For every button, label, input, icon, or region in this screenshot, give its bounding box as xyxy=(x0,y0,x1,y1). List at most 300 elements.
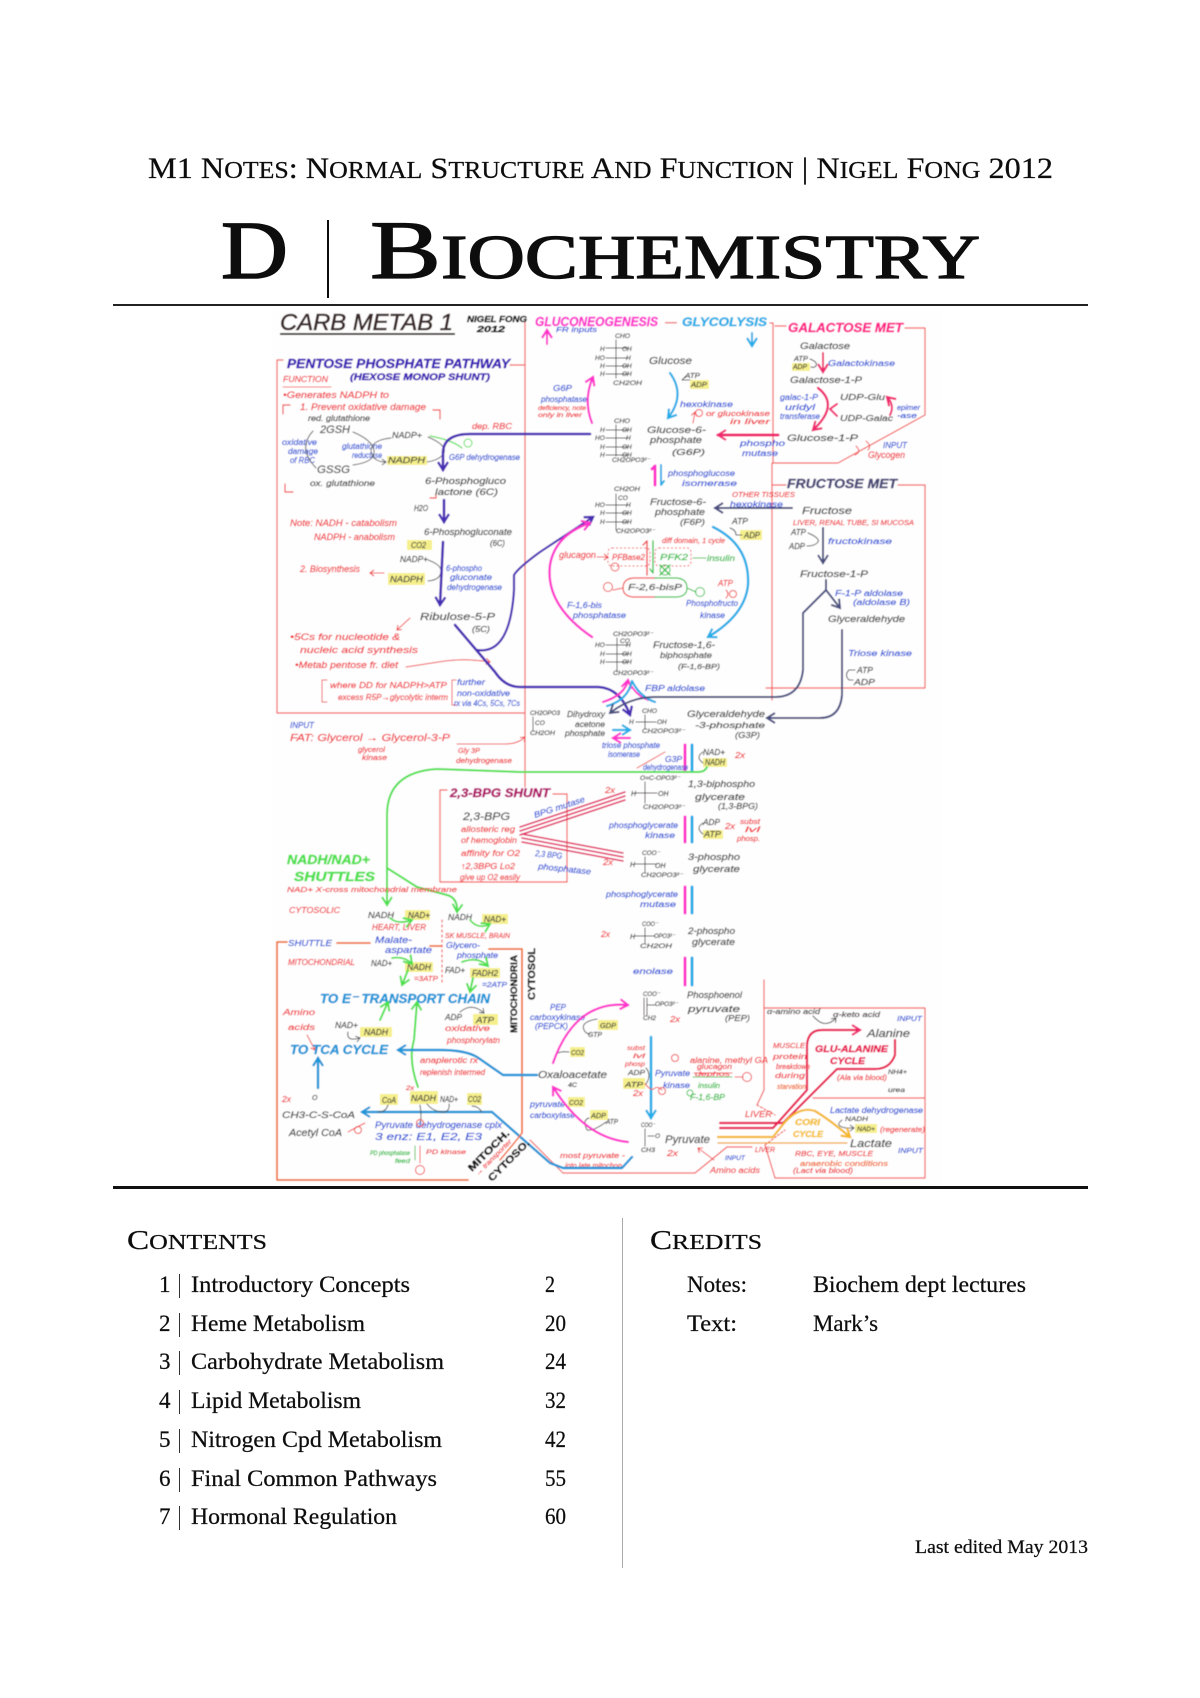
panel: PFK-2 regulation: PFBase2 xyxy=(612,552,645,562)
glucose-6-phosphate structure: H xyxy=(600,452,605,459)
panel frames: red and orange boundaries xyxy=(277,322,925,1180)
panel: gluconeogenesis bypass: dephos xyxy=(695,1072,730,1078)
diagram: carbohydrate metabolism map xyxy=(272,308,942,1185)
contents list: 20 xyxy=(545,1311,566,1336)
3-phosphoglycerate: H xyxy=(630,862,636,869)
title: carb metab: 2012 xyxy=(476,324,505,334)
panel: pentose phosphate pathway: (HEXOSE MONOP SHUNT) xyxy=(350,372,490,383)
panel: fructose 1,6-bisphosphate and aldolase: OH xyxy=(622,651,632,658)
panel: pentose phosphate pathway: 6-Phosphogluconate xyxy=(424,527,512,537)
panel: fructose 1,6-bisphosphate and aldolase: FBP aldolase xyxy=(645,683,705,693)
panel: 2,3-BPG shunt xyxy=(290,720,625,882)
panel: NADH/NAD+ shuttles: ADP xyxy=(444,1012,462,1022)
panel: pentose phosphate pathway: dehydrogenase xyxy=(447,582,502,592)
panel: glucose-alanine and Cori cycles: GLU-ALANINE xyxy=(815,1044,889,1055)
panel: lower glycolysis ladder: subst xyxy=(740,819,761,826)
panel: NADH/NAD+ shuttles: TO E⁻ TRANSPORT CHAIN xyxy=(320,992,491,1006)
3-phosphoglycerate: 3-phospho xyxy=(688,852,740,862)
panel: 2,3-BPG shunt: BPG mutase xyxy=(533,794,586,820)
panel: pentose phosphate pathway: excess R5P→glycolytic interm xyxy=(338,692,448,702)
panel: gluconeogenesis bypass: ATP xyxy=(624,1082,643,1089)
panel: fructose 1,6-bisphosphate and aldolase: CH2OPO3²⁻ xyxy=(613,631,654,638)
panel: NADH/NAD+ shuttles: NAD+ xyxy=(408,910,430,920)
panel: gluconeogenesis bypass: subst xyxy=(627,1045,646,1052)
panel: fructose metabolism: ATP xyxy=(856,665,873,675)
phosphoenolpyruvate: (PEP) xyxy=(725,1013,750,1023)
panel: galactose metabolism: phospho xyxy=(739,438,785,448)
panel: 2,3-BPG shunt: give up O2 easily xyxy=(460,872,521,882)
panel: fructose 1,6-bisphosphate and aldolase: H xyxy=(600,651,605,658)
contents list: 2 xyxy=(159,1311,170,1336)
panel: TCA entry: 3 enz: E1, E2, E3 xyxy=(375,1132,483,1143)
credits: Notes: xyxy=(687,1272,747,1298)
panel: fructose 1,6-bisphosphate and aldolase: CH2OPO3²⁻ xyxy=(613,670,654,677)
label: mitochondria and cytosol: CYTOSO. xyxy=(486,1138,532,1184)
panel: lower glycolysis ladder: triose phosphate xyxy=(602,740,660,750)
panel: PFK-2 regulation: Phosphofructo xyxy=(686,598,738,608)
triose structures xyxy=(530,708,765,740)
label: mitochondria and cytosol: MITOCH. xyxy=(466,1128,512,1174)
label: mitochondria and cytosol: CYTOSOL xyxy=(527,948,538,1000)
panel: lower glycolysis ladder: enolase xyxy=(633,966,673,976)
triose structures: Glyceraldehyde xyxy=(687,709,765,719)
panel: gluconeogenesis bypass: (PEPCK) xyxy=(535,1021,568,1031)
panel: galactose metabolism: -ase xyxy=(897,413,917,420)
panel: lower glycolysis ladder: 2x xyxy=(734,750,746,760)
panel: lower glycolysis ladder: ATP xyxy=(703,829,721,839)
panel: glucose-alanine and Cori cycles: urea xyxy=(888,1088,906,1094)
3-phosphoglycerate: CH2OPO3²⁻ xyxy=(641,872,684,879)
panel: pentose phosphate pathway: glutathione xyxy=(342,441,382,451)
panel: glucose-alanine and Cori cycles: starvation xyxy=(777,1082,806,1091)
diagram paper xyxy=(272,308,942,1185)
contents list: Nitrogen Cpd Metabolism xyxy=(191,1427,442,1453)
2-phosphoglycerate xyxy=(630,921,735,950)
panel: lower glycolysis ladder: phosphoglycerate xyxy=(605,889,678,899)
panel: galactose metabolism: transferase xyxy=(780,411,820,421)
panel: gluconeogenesis bypass: ADP xyxy=(590,1113,606,1120)
panel: NADH/NAD+ shuttles: =3ATP xyxy=(414,976,438,983)
contents list: 42 xyxy=(545,1427,566,1452)
panel: pentose phosphate pathway: NADPH - anabolism xyxy=(314,532,395,542)
1,3-BPG: 1,3-biphospho xyxy=(688,779,755,789)
panel: gluconeogenesis bypass: phosp xyxy=(624,1061,645,1068)
panel: 2,3-BPG shunt: dehydrogenase xyxy=(456,758,512,765)
panel: TCA entry: Acetyl CoA xyxy=(288,1128,342,1139)
panel: 2,3-BPG shunt: FAT: Glycerol → Glycerol-3-P xyxy=(290,733,450,744)
panel: glycolysis upper pathway: phosphatase xyxy=(540,394,587,404)
panel: pentose phosphate pathway: where DD for NADPH>ATP xyxy=(330,680,447,690)
title: carb metab: NIGEL FONG xyxy=(467,314,527,324)
3-phosphoglycerate: COO⁻ xyxy=(642,850,661,857)
panel: TCA entry: Pyruvate dehydrogenase cplx xyxy=(375,1120,503,1130)
3-phosphoglycerate: OH xyxy=(655,863,666,870)
panel: pentose phosphate pathway: 2GSH xyxy=(319,424,350,436)
2-phosphoglycerate: 2-phospho xyxy=(687,926,735,936)
panel: gluconeogenesis bypass: 4C xyxy=(568,1083,578,1089)
glucose-6-phosphate structure: CH2OPO3²⁻ xyxy=(612,457,651,464)
panel: fructose 1,6-bisphosphate and aldolase: HO xyxy=(595,642,605,649)
panel: glucose-alanine and Cori cycles: α-keto acid xyxy=(833,1012,882,1019)
panel: lower glycolysis ladder: ADP xyxy=(702,817,720,827)
panel: glycolysis upper pathway: Fructose-6- xyxy=(650,497,706,508)
panel: gluconeogenesis bypass: GTP xyxy=(588,1032,602,1039)
panel: pentose phosphate pathway: lactone (6C) xyxy=(435,487,498,497)
panel: pentose phosphate pathway: Ribulose-5-P xyxy=(420,612,495,623)
panel: pentose phosphate pathway: nucleic acid synthesis xyxy=(300,645,419,655)
heading: gluconeogenesis and glycolysis: GLUCONEOGENESIS xyxy=(535,314,658,329)
panel: lower glycolysis ladder xyxy=(600,740,761,1024)
panel: 2,3-BPG shunt: 2,3-BPG xyxy=(462,811,510,823)
panel: glycolysis upper pathway: phosphate xyxy=(649,435,702,445)
panel: 2,3-BPG shunt: 2,3 BPG xyxy=(534,848,563,861)
phosphoenolpyruvate: Phosphoenol xyxy=(687,990,743,1000)
panel: glucose-alanine and Cori cycles: NADH xyxy=(845,1116,868,1123)
1,3-BPG: OH xyxy=(658,791,669,798)
panel: PFK-2 regulation: PFK2 xyxy=(660,552,688,562)
panel: 2,3-BPG shunt: 2,3-BPG SHUNT xyxy=(449,786,552,800)
panel: galactose metabolism: Galactokinase xyxy=(828,358,895,368)
panel: glucose-alanine and Cori cycles: CORI xyxy=(795,1118,821,1127)
glucose-6-phosphate structure xyxy=(595,418,651,464)
phosphoenolpyruvate xyxy=(643,990,750,1024)
contents list: 3 xyxy=(159,1349,170,1374)
contents list: Carbohydrate Metabolism xyxy=(191,1349,444,1375)
panel: NADH/NAD+ shuttles: Malate- xyxy=(375,935,412,945)
glucose structure: OH xyxy=(622,371,632,378)
panel: pentose phosphate pathway: GSSG xyxy=(317,464,350,476)
panel: pentose phosphate pathway: 6-phospho xyxy=(446,563,482,573)
panel: gluconeogenesis bypass: kinase xyxy=(663,1080,690,1090)
glucose structure: H xyxy=(600,346,605,353)
panel: glycolysis upper pathway: ATP xyxy=(731,516,748,526)
panel: glycolysis upper pathway: (F6P) xyxy=(680,517,705,527)
credits heading: CREDITS xyxy=(650,1225,762,1255)
contents list: Heme Metabolism xyxy=(191,1311,365,1337)
panel: pentose phosphate pathway: PENTOSE PHOSPHATE PATHWAY xyxy=(287,356,511,371)
panel: glucose-alanine and Cori cycles: CYCLE xyxy=(793,1130,824,1139)
contents list: 5 xyxy=(159,1427,170,1452)
panel: pentose phosphate pathway: FUNCTION xyxy=(283,374,329,384)
fructose-6-phosphate structure: H xyxy=(600,519,605,526)
pyruvate: 2x xyxy=(666,1148,679,1158)
last edited note: Last edited May 2013 xyxy=(915,1537,1088,1558)
fructose-6-phosphate structure: OH xyxy=(622,510,632,517)
panel: pentose phosphate pathway: damage xyxy=(288,446,318,456)
panel: pentose phosphate pathway: Note: NADH - catabolism xyxy=(290,518,398,528)
panel: PFK-2 regulation: insulin xyxy=(707,553,735,563)
panel: NADH/NAD+ shuttles: MITOCHONDRIAL xyxy=(288,957,355,967)
panel: gluconeogenesis bypass: ATP xyxy=(605,1119,618,1126)
panel: fructose metabolism: fructokinase xyxy=(828,536,892,546)
triose structures: -3-phosphate xyxy=(695,720,765,730)
2-phosphoglycerate: CH2OH xyxy=(640,943,672,950)
panel: NADH/NAD+ shuttles: phosphate xyxy=(456,951,499,960)
panel: glucose-alanine and Cori cycles: α-amino acid xyxy=(767,1009,821,1016)
3-phosphoglycerate xyxy=(630,850,740,879)
fructose-6-phosphate structure: OH xyxy=(622,519,632,526)
fructose-6-phosphate structure: HO xyxy=(595,502,605,509)
panel: glucose-alanine and Cori cycles: during xyxy=(775,1071,806,1080)
panel: glycolysis upper pathway: ADP xyxy=(690,382,707,389)
panel: gluconeogenesis bypass: GDP xyxy=(600,1023,616,1030)
panel: glycolysis upper pathway: Glucose xyxy=(649,356,693,367)
panel: NADH/NAD+ shuttles: SK MUSCLE, BRAIN xyxy=(445,933,511,940)
pyruvate xyxy=(641,1122,710,1158)
pyruvate: COO⁻ xyxy=(641,1122,655,1129)
triose structures: CO xyxy=(535,720,545,727)
panel: glucose-alanine and Cori cycles: LIVER xyxy=(755,1147,775,1154)
panel: NADH/NAD+ shuttles: CYTOSOLIC xyxy=(289,905,341,915)
panel: gluconeogenesis bypass: Pyruvate xyxy=(655,1068,690,1078)
panel: fructose metabolism: Glyceraldehyde xyxy=(828,614,905,624)
panel: glycolysis upper pathway: isomerase xyxy=(682,478,737,488)
panel: TCA entry: 2x xyxy=(405,1086,415,1092)
panel: NADH/NAD+ shuttles: NADH/NAD+ xyxy=(287,852,370,867)
panel: NADH/NAD+ shuttles: NAD+ X-cross mitochondrial membrane xyxy=(287,885,457,894)
panel: galactose metabolism: GALACTOSE MET xyxy=(788,320,904,335)
2-phosphoglycerate: glycerate xyxy=(692,937,735,947)
panel: pentose phosphate pathway: rx via 4Cs, 5Cs, 7Cs xyxy=(454,698,521,708)
glucose structure: H xyxy=(626,355,631,362)
panel: glycolysis upper pathway xyxy=(538,327,795,540)
panel: glucose-alanine and Cori cycles: anaerobic conditions xyxy=(800,1159,888,1168)
panel: glucose-alanine and Cori cycles: INPUT xyxy=(898,1148,924,1155)
contents list: 24 xyxy=(545,1349,566,1374)
panel: fructose 1,6-bisphosphate and aldolase: OH xyxy=(622,659,632,666)
contents list: 1 xyxy=(159,1272,170,1297)
panel: glycolysis upper pathway: ADP xyxy=(743,530,760,540)
panel: lower glycolysis ladder: NAD+ xyxy=(703,747,725,757)
panel: 2,3-BPG shunt: phosphatase xyxy=(537,861,592,877)
panel: pentose phosphate pathway: •Metab pentose fr. diet xyxy=(295,660,399,670)
panel: galactose metabolism: ATP xyxy=(793,356,808,363)
glucose-6-phosphate structure: CHO xyxy=(614,418,630,425)
contents list xyxy=(127,1225,566,1530)
triose structures: (G3P) xyxy=(735,730,760,740)
panel: gluconeogenesis bypass: CO2 xyxy=(571,1050,584,1057)
panel: gluconeogenesis bypass: ADP xyxy=(627,1070,645,1077)
panel: NADH/NAD+ shuttles: =2ATP xyxy=(482,982,507,989)
panel: glucose-alanine and Cori cycles: Lactate xyxy=(850,1138,892,1150)
panel: PFK-2 regulation: diff domain, 1 cycle xyxy=(662,538,725,545)
panel: NADH/NAD+ shuttles: NADH xyxy=(448,912,473,922)
label: mitochondria and cytosol xyxy=(466,948,538,1184)
panel: glucose-alanine and Cori cycles: INPUT xyxy=(725,1155,746,1162)
panel: NADH/NAD+ shuttles: NAD+ xyxy=(371,958,392,968)
contents list: 7 xyxy=(159,1504,170,1529)
panel: TCA entry: TO TCA CYCLE xyxy=(290,1042,388,1057)
panel: pentose phosphate pathway: further xyxy=(457,677,486,687)
panel: TCA entry: NAD+ xyxy=(440,1094,458,1104)
contents list: 60 xyxy=(545,1504,566,1529)
panel: gluconeogenesis bypass: Oxaloacetate xyxy=(538,1070,607,1081)
panel: glycolysis upper pathway: or glucokinase xyxy=(706,411,770,418)
panel: NADH/NAD+ shuttles: acids xyxy=(288,1022,316,1032)
glucose structure: CH2OH xyxy=(613,380,642,387)
panel: gluconeogenesis bypass: 2x xyxy=(632,1088,644,1098)
glucose structure: HO xyxy=(595,355,605,362)
panel: pentose phosphate pathway: NADP+ xyxy=(392,430,422,440)
panel: fructose metabolism: ADP xyxy=(853,677,875,687)
panel: gluconeogenesis bypass xyxy=(529,1002,768,1170)
contents list: 32 xyxy=(545,1388,566,1413)
panel: gluconeogenesis bypass: insulin xyxy=(698,1083,720,1090)
panel: pentose phosphate pathway: 6-Phosphogluco xyxy=(425,476,506,486)
panel: glycolysis upper pathway: G6P xyxy=(553,383,572,393)
panel: TCA entry: feed xyxy=(395,1158,410,1165)
panel: pentose phosphate pathway: H2O xyxy=(414,503,428,513)
1,3-BPG: H xyxy=(631,791,637,798)
phosphoenolpyruvate: OPO3²⁻ xyxy=(655,1001,679,1008)
panel: lower glycolysis ladder: phosp. xyxy=(736,836,760,843)
panel: glycolysis upper pathway: hexokinase xyxy=(680,399,733,409)
fructose-6-phosphate structure: CH2OH xyxy=(614,486,640,493)
pyruvate: CH3 xyxy=(641,1147,655,1154)
panel: glucose-alanine and Cori cycles: RBC, EYE, MUSCLE xyxy=(795,1149,874,1158)
panel: fructose 1,6-bisphosphate and aldolase: biphosphate xyxy=(660,650,712,660)
panel: lower glycolysis ladder: 2x xyxy=(600,929,611,939)
panel: glucose-alanine and Cori cycles: NH4+ xyxy=(888,1070,908,1076)
contents list: 55 xyxy=(545,1466,566,1491)
2-phosphoglycerate: COO⁻ xyxy=(642,921,658,928)
panel: fructose 1,6-bisphosphate and aldolase xyxy=(530,631,765,740)
triose structures: CH2OH xyxy=(530,730,555,737)
label: mitochondria and cytosol: → transporter xyxy=(474,1138,514,1177)
panel: TCA entry: anaplerotic rx xyxy=(420,1055,479,1065)
panel: lower glycolysis ladder: kinase xyxy=(645,830,675,840)
panel: glucose-alanine and Cori cycles: MUSCLE xyxy=(773,1041,806,1050)
panel: gluconeogenesis bypass: most pyruvate - xyxy=(560,1153,626,1160)
heading: gluconeogenesis and glycolysis: GLYCOLYSIS xyxy=(682,315,767,329)
panel: glucose-alanine and Cori cycles: INPUT xyxy=(897,1016,923,1023)
panel: pentose phosphate pathway xyxy=(282,356,630,715)
1,3-BPG: O=C-OPO3²⁻ xyxy=(640,775,681,782)
glucose-6-phosphate structure: H xyxy=(626,435,631,442)
panel: pentose phosphate pathway: ox. glutathione xyxy=(310,478,375,488)
panel: fructose metabolism: ATP xyxy=(790,527,806,537)
panel: fructose metabolism xyxy=(610,477,914,718)
contents list: Final Common Pathways xyxy=(191,1466,437,1492)
triose structures: CH2OPO3²⁻ xyxy=(642,728,686,735)
panel: pentose phosphate pathway: gluconate xyxy=(450,572,492,582)
phosphoenolpyruvate: 2x xyxy=(669,1014,681,1024)
panel: TCA entry: CH3-C-S-CoA xyxy=(282,1110,355,1120)
panel: NADH/NAD+ shuttles: Amino xyxy=(282,1007,315,1017)
triose structures: acetone xyxy=(575,719,605,729)
panel: PFK-2 regulation: glucagon xyxy=(559,550,596,560)
panel: 2,3-BPG shunt: glycerol xyxy=(358,747,385,754)
panel: fructose metabolism: Fructose xyxy=(802,506,853,517)
contents list: 2 xyxy=(545,1272,555,1297)
panel: galactose metabolism: Galactose xyxy=(800,341,850,351)
panel: glucose-alanine and Cori cycles: (Lact via blood) xyxy=(793,1168,853,1175)
credits: Biochem dept lectures xyxy=(813,1272,1026,1298)
panel: glycolysis upper pathway: ATP xyxy=(684,373,700,380)
panel: pentose phosphate pathway: dep. RBC xyxy=(472,421,513,431)
panel: TCA entry: replenish intermed xyxy=(420,1067,485,1077)
panel: galactose metabolism: Galactose-1-P xyxy=(790,375,862,385)
panel: NADH/NAD+ shuttles: NAD+ xyxy=(335,1020,358,1030)
panel: TCA entry xyxy=(281,1042,632,1174)
panel: lower glycolysis ladder: NADH xyxy=(705,757,726,767)
panel: fructose 1,6-bisphosphate and aldolase: (F-1,6-BP) xyxy=(678,664,720,671)
panel: fructose metabolism: Fructose-1-P xyxy=(800,569,868,579)
panel: lower glycolysis ladder: 2x xyxy=(724,821,736,831)
panel: fructose 1,6-bisphosphate and aldolase: Fructose-1,6- xyxy=(653,640,715,650)
panel: pentose phosphate pathway: oxidative xyxy=(282,437,317,447)
panel: NADH/NAD+ shuttles: Glycero- xyxy=(446,941,480,950)
panel: pentose phosphate pathway: (5C) xyxy=(472,624,490,634)
1,3-BPG: glycerate xyxy=(695,792,745,802)
triose structures: H xyxy=(629,719,634,726)
panel: NADH/NAD+ shuttles: SHUTTLE xyxy=(288,938,332,948)
panel: TCA entry: CoA xyxy=(382,1095,396,1105)
panel: glycolysis upper pathway: phosphoglucose xyxy=(667,468,735,478)
panel: gluconeogenesis bypass: carboxylase xyxy=(530,1110,575,1120)
panel: glucose-alanine and Cori cycles: NAD+ xyxy=(857,1126,875,1133)
panel: PFK-2 regulation: phosphatase xyxy=(572,610,626,620)
panel: TCA entry: O xyxy=(312,1095,318,1102)
1,3-BPG xyxy=(631,775,758,811)
glucose structure: CHO xyxy=(615,333,630,340)
contents heading: CONTENTS xyxy=(127,1225,267,1255)
panel: gluconeogenesis bypass: carboxykinase xyxy=(530,1012,585,1022)
panel: pentose phosphate pathway: 1. Prevent oxidative damage xyxy=(300,402,426,412)
credits xyxy=(650,1225,1026,1337)
panel: lower glycolysis ladder: 2x xyxy=(602,857,614,867)
panel: gluconeogenesis bypass: lvl xyxy=(633,1053,646,1060)
glucose structure: OH xyxy=(622,363,632,370)
panel: galactose metabolism: galac-1-P xyxy=(780,392,818,402)
panel: NADH/NAD+ shuttles: aspartate xyxy=(385,945,432,955)
panel: galactose metabolism: epimer xyxy=(897,405,921,412)
title: carb metab: CARB METAB 1 xyxy=(280,309,453,335)
panel: NADH/NAD+ shuttles: HEART, LIVER xyxy=(372,922,426,932)
panel: NADH/NAD+ shuttles: SHUTTLES xyxy=(294,869,375,884)
panel: fructose metabolism: LIVER, RENAL TUBE, SI MUCOSA xyxy=(793,520,914,527)
panel: glucose-alanine and Cori cycles: Alanine xyxy=(866,1028,910,1040)
panel: galactose metabolism: UDP-Glu xyxy=(840,392,885,402)
phosphoenolpyruvate: COO⁻ xyxy=(643,991,661,998)
panel: gluconeogenesis bypass: into late mitochon xyxy=(565,1163,622,1170)
contents list: Lipid Metabolism xyxy=(191,1388,361,1414)
main heading xyxy=(221,204,980,298)
panel: pentose phosphate pathway: NADPH xyxy=(390,574,424,584)
panel: galactose metabolism: uridyl xyxy=(785,402,817,412)
triose structures: phosphate xyxy=(564,728,605,738)
panel: PFK-2 regulation: F-2,6-bisP xyxy=(628,582,682,592)
3-phosphoglycerate: glycerate xyxy=(693,864,740,874)
triose structures: CH2OPO3 xyxy=(530,710,560,717)
panel: glycolysis upper pathway: (G6P) xyxy=(672,447,705,457)
panel: PFK-2 regulation xyxy=(550,523,748,637)
panel: NADH/NAD+ shuttles: NADH xyxy=(407,962,432,972)
panel: NADH/NAD+ shuttles: NADH xyxy=(364,1027,389,1037)
contents list: 4 xyxy=(159,1388,171,1413)
pyruvate: O xyxy=(655,1133,660,1140)
credits: Text: xyxy=(687,1311,737,1337)
panel: gluconeogenesis bypass: F-1,6-BP xyxy=(690,1092,725,1102)
panel: glycolysis upper pathway: phosphate xyxy=(654,507,705,517)
glucose structure: H xyxy=(600,371,605,378)
main heading: D xyxy=(221,204,288,296)
panel: NADH/NAD+ shuttles xyxy=(282,767,707,1087)
panel: NADH/NAD+ shuttles: NAD+ xyxy=(484,914,506,924)
panel: PFK-2 regulation: kinase xyxy=(700,610,725,620)
panel: gluconeogenesis bypass: PEP xyxy=(550,1002,566,1012)
pyruvate: Pyruvate xyxy=(665,1134,710,1146)
